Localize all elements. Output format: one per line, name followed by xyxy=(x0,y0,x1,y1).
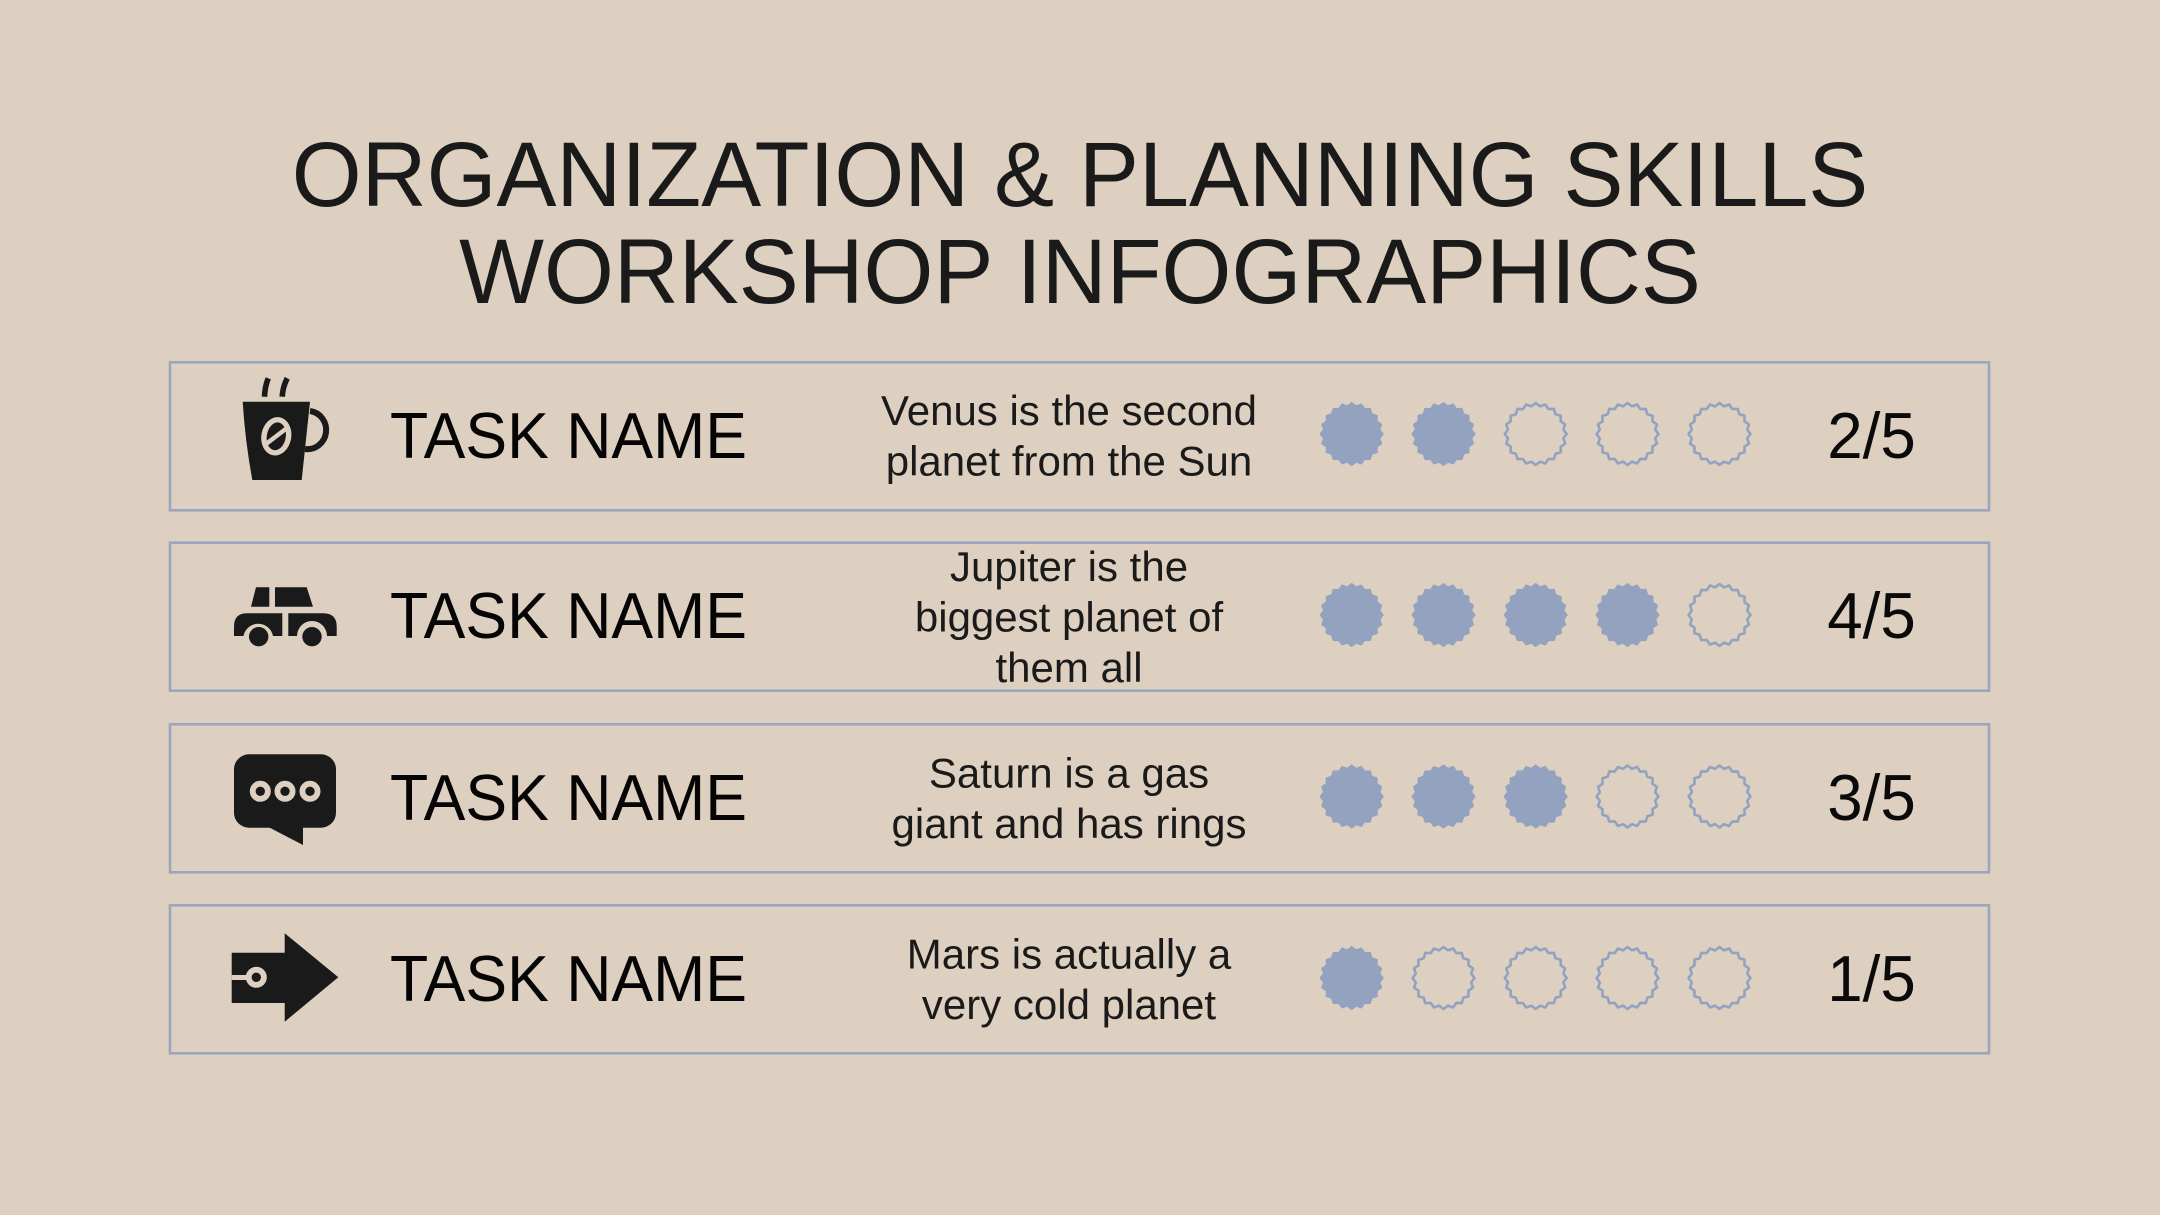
score: 2/5 xyxy=(1827,399,1916,472)
score: 4/5 xyxy=(1827,579,1916,652)
description: Saturn is a gas xyxy=(929,749,1209,796)
title: WORKSHOP INFOGRAPHICS xyxy=(459,221,1701,323)
rating: 1 of 5 xyxy=(1321,947,1750,1009)
description: planet from the Sun xyxy=(886,437,1252,484)
row 2 frame xyxy=(170,543,1989,691)
row 3 frame xyxy=(170,724,1989,872)
description: Mars is actually a xyxy=(907,930,1232,977)
task name: TASK NAME xyxy=(390,579,747,652)
row 4 frame xyxy=(170,905,1989,1053)
icon: coffee cup xyxy=(243,378,326,480)
icon: car xyxy=(234,587,337,646)
panel: task row 4 xyxy=(170,905,1989,1053)
score: 3/5 xyxy=(1827,761,1916,834)
task name: TASK NAME xyxy=(390,761,747,834)
icon: arrow tag xyxy=(232,933,338,1022)
task name: TASK NAME xyxy=(390,942,747,1015)
description: giant and has rings xyxy=(892,800,1246,847)
title xyxy=(292,124,1868,323)
row 1 frame xyxy=(170,362,1989,510)
rating: 4 of 5 xyxy=(1321,584,1750,646)
description: Venus is the second xyxy=(881,387,1257,434)
description: very cold planet xyxy=(922,981,1216,1028)
panel: task row 1 xyxy=(170,362,1989,510)
title: ORGANIZATION & PLANNING SKILLS xyxy=(292,124,1868,226)
panel: task row 2 xyxy=(170,543,1989,691)
panel: task row 3 xyxy=(170,724,1989,872)
task name: TASK NAME xyxy=(390,399,747,472)
description: biggest planet of xyxy=(915,593,1223,640)
rating: 2 of 5 xyxy=(1321,403,1750,465)
score: 1/5 xyxy=(1827,942,1916,1015)
rating: 3 of 5 xyxy=(1321,766,1750,828)
description: them all xyxy=(995,644,1143,691)
description: Jupiter is the xyxy=(950,543,1188,590)
icon: speech bubble xyxy=(234,754,336,845)
